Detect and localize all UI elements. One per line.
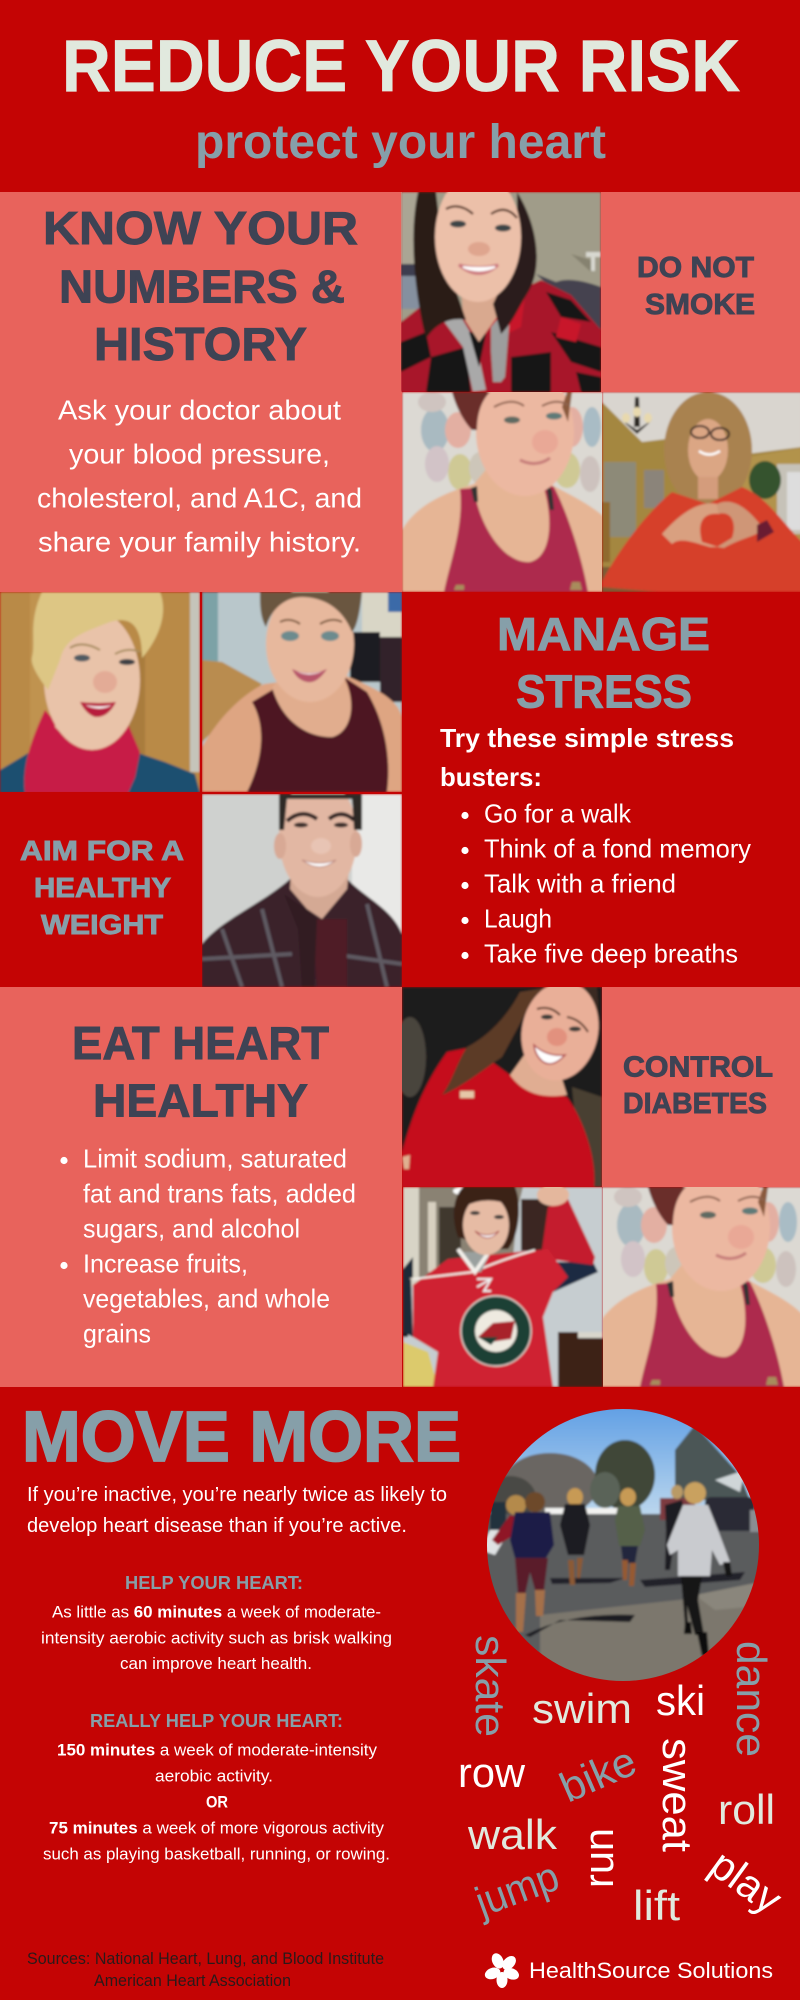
heading: know your numbers and history [43,202,358,370]
word cloud: activities: roll [718,1786,775,1833]
panel: eat heart healthy [0,987,402,1387]
text: sources: American Heart Association [94,1971,291,1990]
list: stress busters: Think of a fond memory [484,834,751,864]
list: stress busters: Talk with a friend [484,868,676,898]
word cloud: activities: play [702,1840,791,1923]
text: ask your doctor: share your family history. [38,526,361,558]
word cloud: activities: row [458,1749,526,1796]
logo: HealthSource Solutions [483,1951,773,1988]
header band [62,26,740,169]
photo: woman in Minnesota Wild jersey [403,1184,603,1387]
text: sources [27,1949,384,1990]
list: eating advice: vegetables, and whole [83,1284,330,1314]
text: stress busters intro: Try these simple stress [440,723,734,753]
title: REDUCE YOUR RISK [62,26,740,107]
block: help your heart: can improve heart health. [120,1655,312,1673]
panel background [0,987,402,1387]
block: help your heart: HELP YOUR HEART: [125,1573,303,1593]
heading: eat heart healthy: EAT HEART [72,1017,329,1069]
text: stress busters intro: busters: [440,762,542,792]
panel background [0,192,402,592]
icon: five-petal flower [483,1951,521,1988]
panel: do not smoke [601,192,800,392]
panel background [402,592,800,987]
heading: know your numbers and history: KNOW YOUR [43,202,358,254]
text: ask your doctor: cholesterol, and A1C, and [37,482,362,514]
heading: know your numbers and history: NUMBERS & [59,260,345,312]
text: inactive warning [27,1484,447,1537]
word cloud: activities: jump [467,1852,565,1926]
word cloud: activities: skate [467,1635,514,1737]
heading: aim for a healthy weight: HEALTHY [34,872,171,903]
heading: know your numbers and history: HISTORY [94,318,307,370]
heading: do not smoke: DO NOT [637,252,754,284]
list: eating advice: fat and trans fats, added [83,1178,356,1208]
heading: control diabetes [623,1052,773,1120]
panel background [0,793,201,987]
heading: aim for a healthy weight: AIM FOR A [20,835,184,866]
list: eating advice: sugars, and alcohol [83,1214,300,1244]
block: help your heart [41,1573,392,1673]
photo: group walking outdoors [487,1409,759,1681]
word cloud: activities [458,1635,791,1929]
list: eating advice: Increase fruits, [83,1248,248,1278]
block: really help your heart: aerobic activity. [155,1768,273,1786]
heading: manage stress: STRESS [516,666,692,718]
photo: woman in red plaid jacket [401,172,601,392]
word cloud: activities: swim [532,1685,632,1732]
text: ask your doctor: your blood pressure, [69,438,330,470]
photo: woman in maroon tank top [402,392,602,592]
heading: control diabetes: CONTROL [623,1052,773,1084]
heading: do not smoke: SMOKE [645,289,755,321]
photo: young man in plaid shirt [202,777,402,987]
subtitle: protect your heart [195,116,606,169]
text: ask your doctor: Ask your doctor about [58,394,341,426]
block: really help your heart: 150 minutes a week of moderate-intensity [57,1742,378,1760]
logo wordmark: HealthSource Solutions [529,1958,773,1983]
block: really help your heart: REALLY HELP YOUR HEART: [90,1711,343,1731]
block: really help your heart: 75 minutes a week of more vigorous activity [49,1820,385,1838]
text: ask your doctor [37,394,362,558]
panel: know your numbers [0,192,402,592]
panel: aim for a healthy weight [0,793,201,987]
photo: woman in red sweatshirt [402,987,602,1187]
list: stress busters: Take five deep breaths [484,938,738,968]
photo: blonde woman with red scarf [0,592,200,793]
word cloud: activities: walk [467,1811,558,1858]
word cloud: activities: run [575,1828,622,1888]
photo: smiling woman in dark tank [202,586,402,792]
list: stress busters: Go for a walk [484,798,632,828]
heading: move more: MOVE MORE [22,1398,461,1477]
word cloud: activities: bike [553,1737,643,1811]
text: inactive warning: If you’re inactive, you’re nearly twice as likely to [27,1484,447,1506]
heading: aim for a healthy weight [20,835,184,940]
block: really help your heart: OR [206,1794,228,1812]
list: eating advice: grains [83,1318,151,1348]
word cloud: activities: dance [728,1641,775,1757]
panel: control diabetes [602,987,800,1187]
list: eating advice: Limit sodium, saturated [83,1144,347,1174]
heading: eat heart healthy: HEALTHY [93,1074,308,1126]
photo: woman in maroon tank top, repeated [603,1187,800,1387]
photo: woman making heart with hands [602,392,800,592]
list: stress busters: Laugh [484,904,552,934]
word cloud: activities: lift [633,1882,680,1929]
text: stress busters intro [440,723,734,792]
word cloud: activities: ski [656,1677,705,1724]
panel background [601,192,800,392]
block: help your heart: As little as 60 minutes a week of moderate- [52,1604,381,1622]
panel background [602,987,800,1187]
panel: manage stress [402,592,800,987]
heading: manage stress [497,608,710,718]
block: really help your heart: such as playing basketball, running, or rowing. [43,1846,390,1864]
heading: control diabetes: DIABETES [623,1088,767,1120]
list: stress busters [461,798,751,968]
block: really help your heart [43,1711,390,1864]
heading: do not smoke [637,252,755,321]
heading: manage stress: MANAGE [497,608,710,660]
text: sources: Sources: National Heart, Lung, and Blood Institute [27,1949,384,1968]
heading: eat heart healthy [72,1017,329,1126]
panel: move more [22,1398,461,1990]
list: eating advice [60,1144,356,1348]
block: help your heart: intensity aerobic activity such as brisk walking [41,1630,392,1648]
text: inactive warning: develop heart disease than if you’re active. [27,1515,407,1537]
heading: aim for a healthy weight: WEIGHT [41,909,163,940]
word cloud: activities: sweat [654,1738,701,1852]
